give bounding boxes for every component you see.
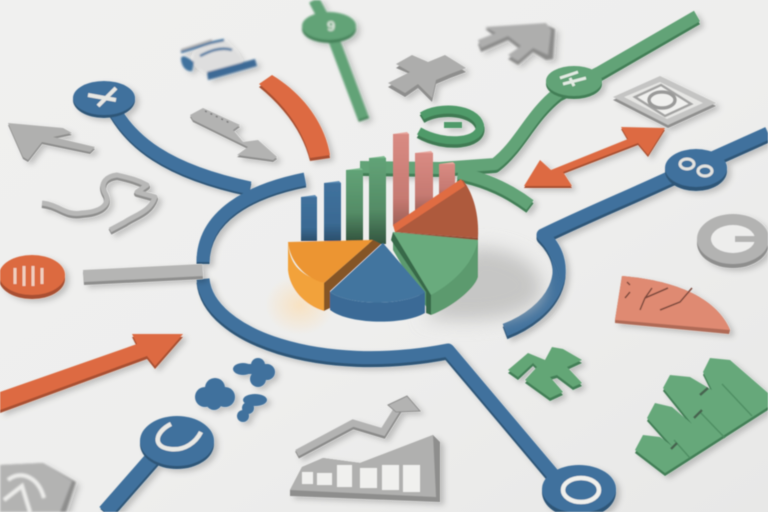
- icon: grey cross leaf: [388, 55, 466, 102]
- grey bar: [83, 264, 203, 285]
- icon: salmon quarter card: [615, 276, 730, 334]
- green pin: top node: [302, 0, 364, 120]
- icon: blue cluster: [195, 358, 275, 422]
- icon: bottom-left grey block: [0, 463, 76, 512]
- icon: green small chart: [508, 347, 582, 401]
- pie slice: red: [393, 179, 478, 241]
- pie shadow: [425, 248, 542, 320]
- icon: grey ring right: [697, 214, 768, 268]
- arrow: orange lower-left: [0, 334, 183, 413]
- arrow: grey pointing right-down: [190, 108, 277, 162]
- blue pin: bottom-left U node: [105, 416, 214, 512]
- icon: orange curved bar: [259, 75, 330, 161]
- blue connector: lower ring arc to bottom node: [203, 279, 616, 512]
- icon: green ring: [419, 110, 480, 143]
- icon: double-o node: [665, 149, 727, 191]
- arrow: grey left-top: [8, 123, 95, 162]
- arrow: grey house top right: [478, 23, 555, 65]
- icon: grey bar chart base: [290, 435, 440, 502]
- green connector: top right line with node: [360, 16, 697, 208]
- blue connector: upper-left arc to node: [73, 81, 305, 264]
- icon: circle node: [542, 465, 616, 512]
- icon: green stepped bars: [635, 358, 768, 476]
- pie slice: green: [391, 232, 478, 315]
- blue connector: right arc to node: [505, 133, 768, 333]
- icon: grey trend arrow: [297, 396, 420, 455]
- arrow: orange double-headed: [524, 127, 665, 188]
- panel: central pie and bar chart: [265, 132, 542, 335]
- icon: grey framed square: [613, 76, 716, 128]
- icon: blue device top left: [181, 40, 257, 80]
- bar chart: [301, 132, 455, 244]
- icon: orange coin: [0, 255, 65, 299]
- icon: grey squiggle: [42, 175, 155, 232]
- glow under pie: [265, 275, 335, 335]
- icon: plus node: [73, 81, 135, 118]
- green pin: top node: 9: [327, 18, 335, 35]
- pie slice: blue: [330, 243, 425, 322]
- icon: green node with bars: [546, 66, 602, 99]
- pie slice: orange: [288, 240, 381, 311]
